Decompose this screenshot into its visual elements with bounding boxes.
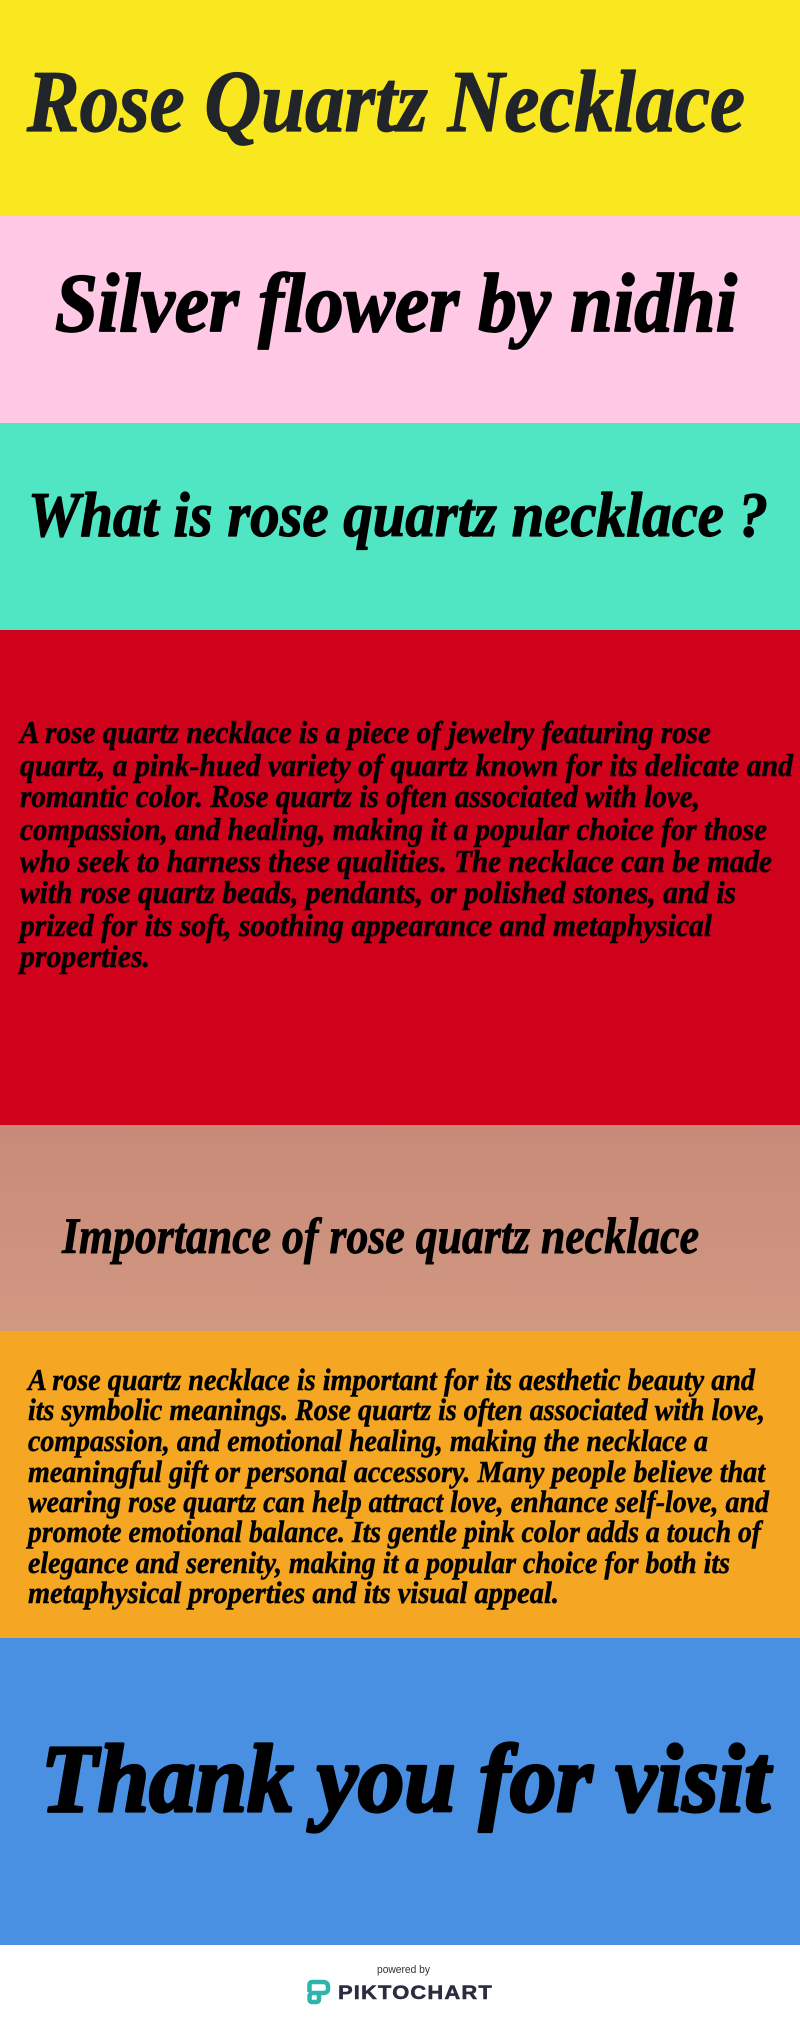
panel: title [0, 0, 800, 216]
powered by label: powered by [377, 1964, 430, 1976]
panel: importance heading [0, 1125, 800, 1331]
text block: description: romantic color. Rose quartz is often associated with love, [20, 778, 700, 814]
text block: description [17, 714, 794, 974]
text block: importance [25, 1362, 769, 1610]
heading: thank you: Thank you for visit [41, 1725, 773, 1832]
heading: what is rose quartz necklace: What is rose quartz necklace ? [28, 480, 768, 550]
text block: importance: metaphysical properties and its visual appeal. [28, 1575, 559, 1610]
panel: importance text [0, 1331, 800, 1638]
text block: description: A rose quartz necklace is a piece of jewelry featuring rose [18, 714, 711, 750]
text block: description: with rose quartz beads, pendants, or polished stones, and is [20, 874, 736, 910]
footer: powered by piktochart [310, 1964, 493, 2004]
panel: subtitle [0, 216, 800, 423]
text block: description: properties. [17, 938, 150, 974]
panel: thank you [0, 1638, 800, 1945]
text block: description: prized for its soft, soothing appearance and metaphysical [17, 907, 712, 943]
subtitle: Silver flower by nidhi [55, 257, 737, 350]
icon: piktochart logo [310, 1982, 328, 2002]
text block: importance: compassion, and emotional healing, making the necklace a [28, 1423, 708, 1458]
panel: question heading [0, 423, 800, 630]
panel: description [0, 630, 800, 1125]
wordmark: PIKTOCHART [338, 1983, 493, 2004]
text block: importance: elegance and serenity, making it a popular choice for both its [28, 1545, 730, 1580]
heading: importance: Importance of rose quartz necklace [61, 1209, 699, 1265]
